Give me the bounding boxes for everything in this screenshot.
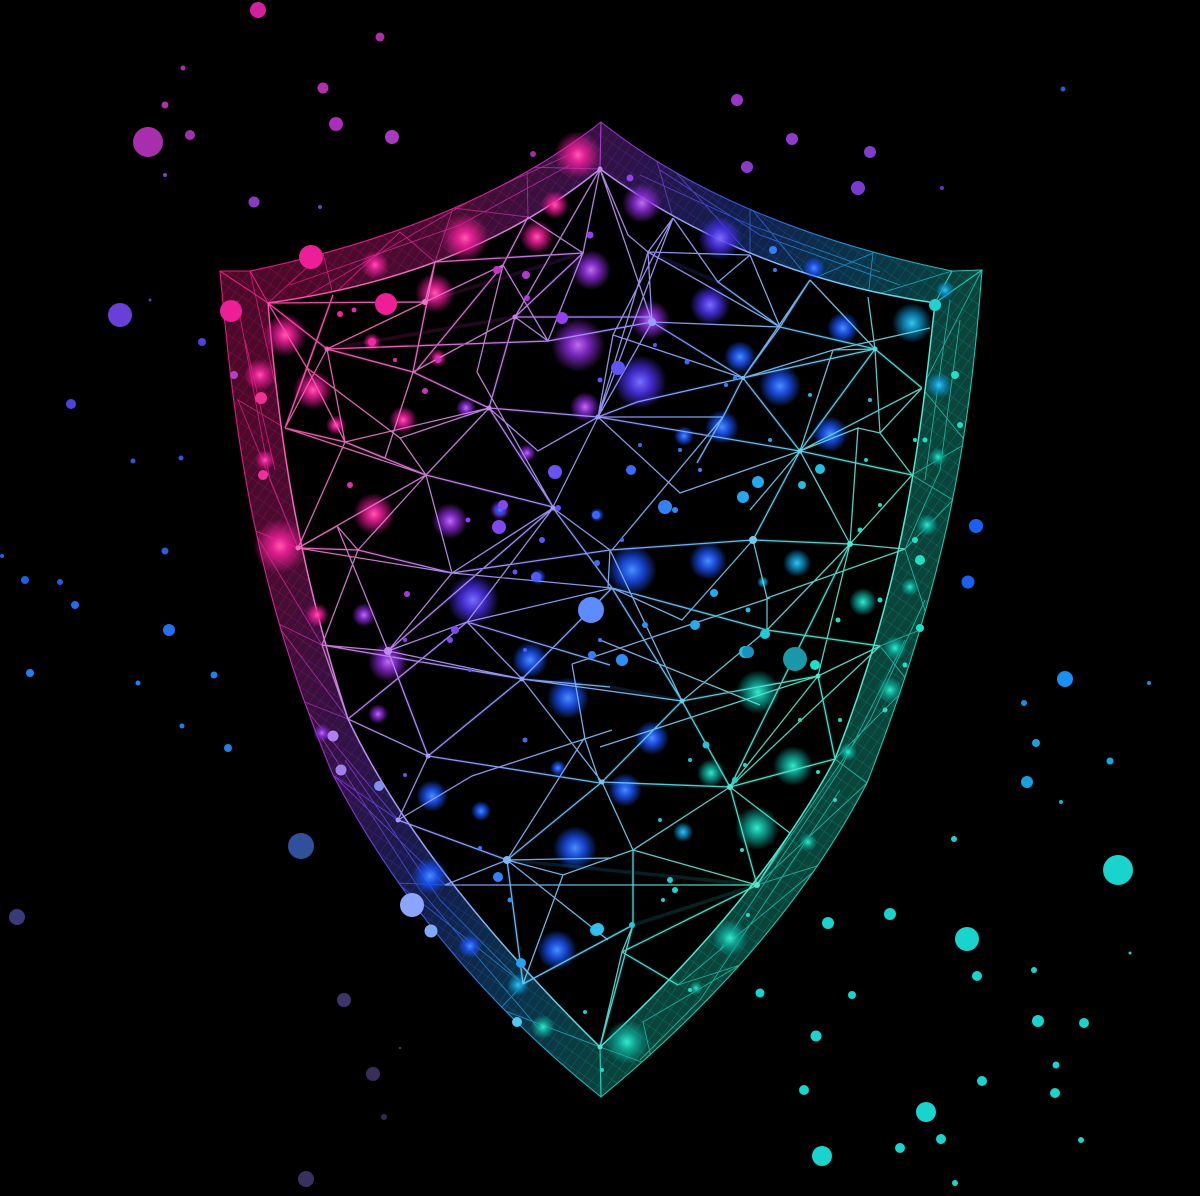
scattered particles: teal bottom right (756, 836, 1133, 1186)
scattered particles: purple top right (530, 86, 1066, 195)
rim edge lines (220, 122, 982, 1097)
large translucent dots on shield (220, 245, 807, 1027)
network nodes (296, 166, 878, 1050)
rim fill (220, 122, 982, 1097)
scattered particles: dim bottom left (9, 833, 401, 1187)
blue glows (412, 257, 859, 970)
glows (244, 131, 954, 1064)
inner wall line (268, 169, 935, 1047)
rim mesh hatch (222, 126, 982, 1096)
small dots inside shield (337, 174, 963, 1072)
pink glows (244, 131, 602, 627)
network lines halo (268, 217, 922, 1047)
purple glows (313, 183, 670, 742)
scattered particles: blue left (0, 399, 232, 752)
rim mesh strands (237, 122, 982, 1097)
teal glows (531, 448, 947, 1064)
cyan glows (507, 281, 954, 996)
shield rim (219, 121, 983, 1098)
scattered particles: pink and purple top left (108, 2, 399, 346)
scattered particles: blue right (962, 519, 1151, 804)
network lines inside shield (268, 169, 930, 1047)
blue violet glows (447, 216, 742, 626)
